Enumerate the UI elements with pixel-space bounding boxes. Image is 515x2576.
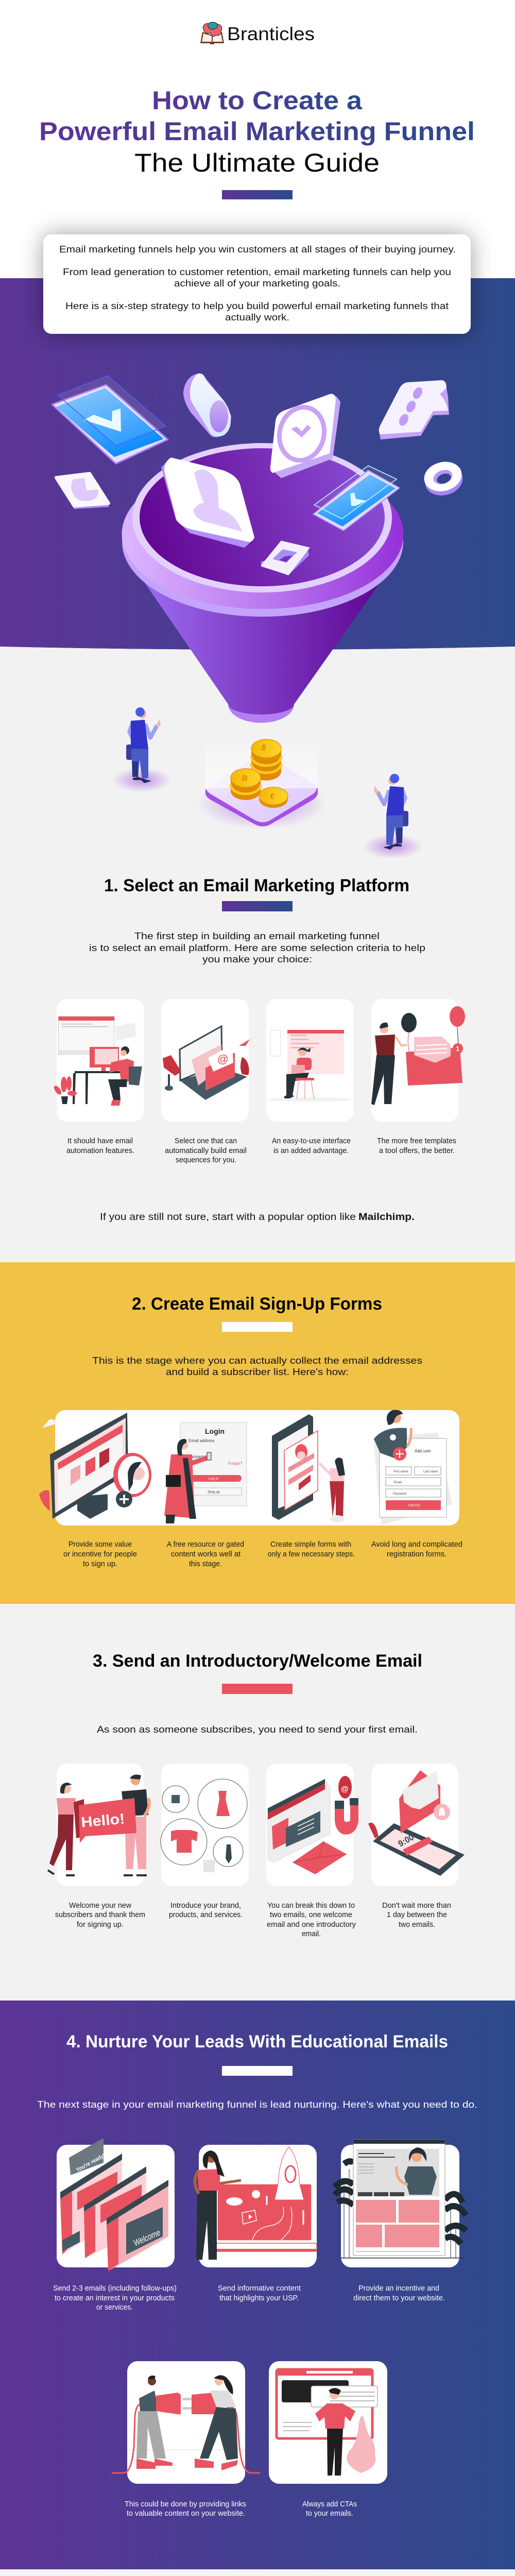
panel: step 4 <box>0 2001 515 2569</box>
card: builds sequences: @ <box>217 1053 228 1065</box>
captions: step 4 first row: that highlights your USP. <box>219 2294 299 2302</box>
captions: step 1: The more free templates <box>377 1137 456 1145</box>
captions: step 2: Provide some value <box>68 1540 132 1549</box>
heading: step 1: 1. Select an Email Marketing Platform <box>104 876 409 895</box>
card: email sequence windows: You're ready! <box>75 2153 106 2173</box>
card: hello illustration: Hello! <box>80 1810 126 1831</box>
person: left observer <box>112 707 171 792</box>
coin stack with bitcoin <box>231 769 261 800</box>
title: Powerful Email Marketing Funnel <box>39 117 475 146</box>
icon: phone with check <box>313 466 400 531</box>
captions: step 3: 1 day between the <box>387 1910 447 1919</box>
card: automation features <box>53 999 144 1122</box>
text: step 4 intro: The next stage in your email marketing funnel is lead nurturing. Here's what you need to do. <box>37 2099 477 2110</box>
illustration: login screen <box>164 1422 247 1523</box>
intro card: actually work. <box>225 312 289 323</box>
captions: step 4 first row: Provide an incentive and <box>358 2284 439 2293</box>
card: email sequence windows: Welcome <box>132 2228 162 2248</box>
title: The Ultimate Guide <box>134 148 380 177</box>
captions: step 1: sequences for you. <box>176 1156 236 1164</box>
captions: step 4 second row: This could be done by providing links <box>125 2500 246 2509</box>
card: product circles <box>161 1764 249 1886</box>
icon: toggle switch <box>183 374 231 437</box>
captions: step 2: Create simple forms with <box>270 1540 351 1549</box>
captions: step 4 first row: or services. <box>96 2303 133 2312</box>
icon: person tile <box>161 457 254 548</box>
text: step 1 intro: you make your choice: <box>202 954 312 964</box>
card: add CTAs <box>269 2361 387 2484</box>
card: easy interface <box>266 999 354 1122</box>
illustration: login screen: Login <box>205 1427 225 1435</box>
card: free templates: 1 <box>456 1045 459 1053</box>
captions: step 1: is an added advantage. <box>273 1146 349 1155</box>
card: incentive webpage <box>335 2140 466 2267</box>
card: builds sequences <box>161 999 250 1122</box>
card: free templates <box>371 999 465 1122</box>
captions: step 3: Don't wait more than <box>382 1901 451 1910</box>
captions: step 4 second row: Always add CTAs <box>302 2500 357 2509</box>
heading: step 3: 3. Send an Introductory/Welcome Email <box>93 1651 422 1671</box>
panel: step 5 <box>0 2569 515 2576</box>
icon: chat bubble <box>379 380 449 439</box>
coin stack with dollar <box>251 739 281 781</box>
captions: step 1: It should have email <box>67 1137 133 1145</box>
coin with euro: € <box>269 791 276 801</box>
captions: step 2 <box>63 1540 462 1568</box>
captions: step 2: content works well at <box>171 1550 241 1558</box>
captions: step 4 second row: to valuable content on your website. <box>127 2509 245 2518</box>
captions: step 2: Avoid long and complicated <box>371 1540 462 1549</box>
captions: step 4 first row: direct them to your website. <box>353 2294 445 2302</box>
captions: step 1: automation features. <box>66 1146 134 1155</box>
illustration: coins on platform <box>197 737 327 829</box>
illustration: add user form: CREATE <box>408 1504 420 1507</box>
captions: step 2: registration forms. <box>387 1550 447 1558</box>
captions: step 3: products, and services. <box>169 1910 243 1919</box>
captions: step 3: Welcome your new <box>69 1901 131 1910</box>
illustration: add user form: Email <box>394 1481 402 1484</box>
text: step 2 intro: and build a subscriber list. Here's how: <box>166 1366 349 1377</box>
captions: step 1: automatically build email <box>165 1146 247 1155</box>
captions: step 4 second row <box>125 2500 357 2518</box>
intro card: From lead generation to customer retention, email marketing funnels can help you <box>63 267 451 277</box>
icon: clock tile <box>270 394 340 478</box>
illustration: add user form: Password <box>393 1493 406 1496</box>
heading: step 4: 4. Nurture Your Leads With Educational Emails <box>66 2032 448 2052</box>
funnel cone <box>139 574 386 715</box>
card: phone and envelope: 9:00 <box>397 1832 416 1849</box>
intro card: Here is a six-step strategy to help you build powerful email marketing funnels that <box>65 301 449 311</box>
captions: step 3: You can break this down to <box>267 1901 355 1910</box>
captions: step 4 first row <box>53 2284 445 2312</box>
illustration: phone with form <box>272 1414 345 1522</box>
captions: step 1 <box>66 1137 456 1164</box>
card: informative content rocket <box>195 2145 317 2267</box>
illustration: login screen: Log in <box>209 1477 218 1481</box>
panel: step 3 <box>0 1604 515 2001</box>
captions: step 4 second row: to your emails. <box>306 2509 353 2518</box>
title <box>39 86 475 177</box>
illustration: login screen: Sing up <box>208 1490 220 1494</box>
illustration: add user form: First name <box>393 1470 408 1473</box>
panel: hero gradient background <box>0 278 515 650</box>
icon: brain on book <box>200 22 224 44</box>
card: connecting plugs <box>112 2361 260 2484</box>
text: step 3 intro: As soon as someone subscribes, you need to send your first email. <box>97 1724 418 1735</box>
cloud <box>42 1419 56 1428</box>
captions: step 2: this stage. <box>189 1560 222 1568</box>
funnel illustration <box>52 374 466 723</box>
illustration: login screen: Password <box>188 1454 207 1459</box>
card: phone and envelope <box>368 1764 465 1886</box>
card: hello illustration <box>48 1764 149 1886</box>
text: step 2 intro: This is the stage where you can actually collect the email addresses <box>92 1355 422 1366</box>
card: step 2 illustrations <box>39 1410 459 1526</box>
illustration: monitor with profiles <box>39 1413 151 1519</box>
coin stack with bitcoin: B <box>241 773 249 784</box>
coin stack with dollar: $ <box>260 743 267 753</box>
lower part of the page: step 5 to footer <box>0 2569 515 2576</box>
text: Mailchimp recommendation: If you are still not sure, start with a popular option like <box>100 1211 356 1223</box>
text: step 2 intro <box>92 1355 422 1377</box>
illustration: add user form: Last name <box>423 1470 438 1473</box>
illustration: login screen: Email address <box>188 1438 215 1443</box>
panel: step 2 <box>0 1262 515 1604</box>
captions: step 1: Select one that can <box>175 1137 237 1145</box>
captions: step 3: email and one introductory <box>267 1920 356 1929</box>
intro card: achieve all of your marketing goals. <box>174 278 340 289</box>
intro card: Email marketing funnels help you win customers at all stages of their buying journey. <box>59 244 456 255</box>
captions: step 2: or incentive for people <box>63 1550 137 1558</box>
illustration: add user form <box>373 1410 452 1525</box>
captions: step 4 first row: Send 2-3 emails (including follow-ups) <box>53 2284 177 2293</box>
text: Mailchimp recommendation: Mailchimp. <box>358 1211 415 1223</box>
captions: step 3: two emails. <box>399 1920 435 1929</box>
captions: step 3: for signing up. <box>77 1920 124 1929</box>
card: browser and magnet: @ <box>341 1785 349 1793</box>
icon: hollow square <box>261 541 310 575</box>
captions: step 3: Introduce your brand, <box>170 1901 241 1910</box>
person: right observer <box>363 774 423 859</box>
icon: ring <box>421 457 466 500</box>
title: How to Create a <box>152 86 363 115</box>
card: browser and magnet <box>266 1764 358 1886</box>
captions: step 3: two emails, one welcome <box>270 1910 352 1919</box>
captions: step 3 <box>55 1901 451 1938</box>
illustration: add user form: Add user <box>415 1449 431 1453</box>
captions: step 1: An easy-to-use interface <box>272 1137 351 1145</box>
heading: step 2: 2. Create Email Sign-Up Forms <box>132 1294 382 1314</box>
coin with euro <box>259 787 288 808</box>
text: step 1 intro: is to select an email platform. Here are some selection criteria to help <box>89 942 425 953</box>
icon: tablet with check <box>52 376 168 464</box>
logo wordmark: Branticles <box>227 23 315 44</box>
captions: step 1: a tool offers, the better. <box>379 1146 455 1155</box>
captions: step 2: A free resource or gated <box>167 1540 244 1549</box>
captions: step 3: email. <box>302 1929 321 1938</box>
text: step 1 intro: The first step in building an email marketing funnel <box>134 930 380 941</box>
card: email sequence windows <box>57 2138 175 2271</box>
header: logo <box>200 22 315 44</box>
intro card <box>43 234 471 334</box>
captions: step 2: to sign up. <box>83 1560 117 1568</box>
illustration: login screen: Forgot? <box>228 1461 243 1466</box>
text: step 1 intro <box>89 930 425 964</box>
captions: step 4 first row: Send informative content <box>218 2284 301 2293</box>
captions: step 4 first row: to create an interest in your products <box>55 2294 175 2302</box>
captions: step 3: subscribers and thank them <box>55 1910 145 1919</box>
captions: step 2: only a few necessary steps. <box>268 1550 355 1558</box>
icon: pie chart tile <box>56 473 109 509</box>
